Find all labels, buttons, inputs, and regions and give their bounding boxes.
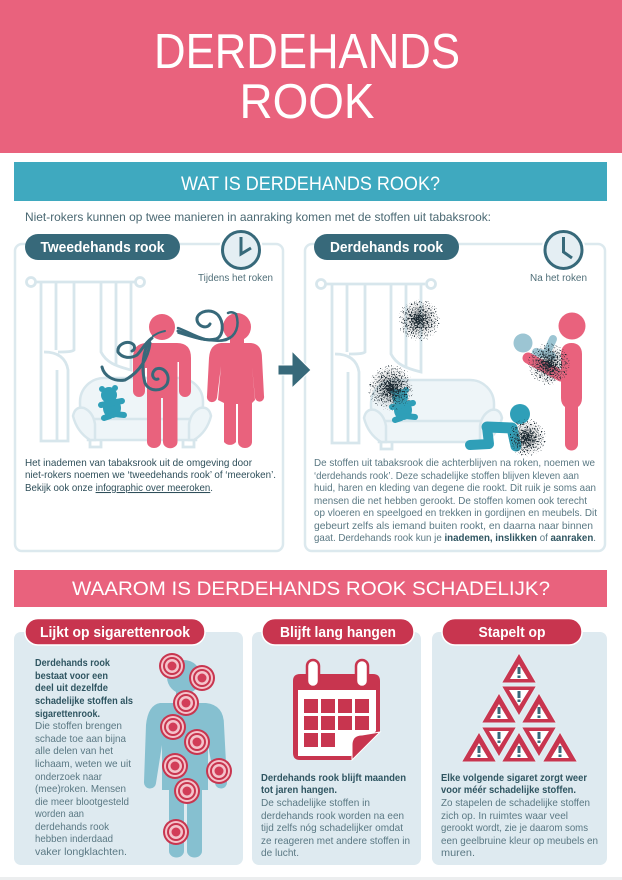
body targets (159, 653, 232, 845)
paragraph: tweedehands rook: Bekijk ook onze infographic over meeroken. (25, 482, 213, 494)
panel: blijft lang hangen (252, 618, 421, 865)
paragraph: De schadelijke stoffen in (261, 797, 370, 809)
paragraph: tot jaren hangen. (261, 784, 337, 796)
pill heading: tweedehands rook (25, 234, 180, 260)
section heading: waarom schadelijk: WAAROM IS DERDEHANDS ROOK SCHADELIJK? (72, 579, 550, 600)
paragraph: muren. (441, 847, 475, 859)
clock label: Na het roken (530, 273, 587, 284)
paragraph: derdehands rook: mensen die net hebben gerookt. De stoffen komen ook terecht (314, 495, 587, 507)
panel: stapelt op (432, 618, 607, 865)
target 9 (163, 819, 189, 845)
target 3 (173, 690, 199, 716)
arrow between panels (278, 351, 311, 388)
paragraph: derdehands rook worden na een (261, 810, 404, 822)
paragraph: Zo stapelen de schadelijke stoffen (441, 797, 590, 809)
paragraph: deel uit dezelfde (35, 682, 108, 694)
baby in arms (514, 334, 553, 356)
target 6 (162, 753, 188, 779)
paragraph: derdehands rook: op vloeren en speelgoed en trekken in gordijnen en meubels. Dit (314, 507, 597, 519)
icon: teddy bear (390, 387, 415, 420)
target 1 (159, 653, 185, 679)
paragraph: tweedehands rook: niet-rokers noemen we ‘tweedehands rook’ of ‘meeroken’. (25, 469, 276, 481)
target 2 (189, 665, 215, 691)
pill heading (262, 618, 414, 645)
target 7 (206, 758, 232, 784)
paragraph: schadelijke stoffen als (35, 695, 133, 707)
paragraph: die meer blootgesteld (35, 796, 129, 808)
pill heading: Stapelt op (478, 624, 546, 641)
paragraph: Derdehands rook blijft maanden (261, 772, 406, 784)
section heading: wat is derdehands rook (14, 162, 607, 201)
icon: teddy bear (99, 385, 124, 418)
pill heading: derdehands rook (314, 234, 459, 260)
intro text: Niet-rokers kunnen op twee manieren in aanraking komen met de stoffen uit tabaksrook: (25, 210, 491, 224)
illustration: curtains (26, 278, 144, 441)
illustration: sofa (73, 378, 211, 447)
paragraph: hebben inderdaad (35, 833, 113, 845)
figure: crawling baby (470, 404, 530, 446)
paragraph (34, 657, 133, 858)
section heading: wat is derdehands rook: WAT IS DERDEHANDS ROOK? (181, 174, 440, 195)
figure: adult holding baby (514, 312, 586, 450)
icon: stacked warning triangles (462, 653, 578, 762)
paragraph: derdehands rook: ‘derdehands rook’. Deze schadelijke stoffen blijven kleven aan (314, 470, 579, 482)
paragraph (441, 772, 598, 859)
pill heading (442, 618, 582, 645)
paragraph: de lucht. (261, 847, 299, 859)
panel: derdehands rook (305, 228, 605, 551)
paragraph: onderzoek naar (35, 771, 102, 783)
panel: lijkt op sigarettenrook (14, 618, 243, 865)
illustration: curtains (316, 280, 436, 443)
figure: blue body (144, 660, 227, 858)
figure: non-smoker (207, 313, 264, 448)
paragraph: Derdehands rook (35, 657, 110, 669)
paragraph: derdehands rook (35, 821, 110, 833)
paragraph: derdehands rook (314, 457, 597, 544)
paragraph: derdehands rook: gebeurt zelfs als iemand buiten rookt, en daarna naar binnen (314, 520, 593, 532)
icon: clock after smoking (542, 228, 586, 272)
smoke swirls (102, 311, 238, 390)
paragraph: sigarettenrook. (35, 708, 100, 720)
paragraph: zich op. In ruimtes waar veel (441, 810, 568, 822)
clock label: Tijdens het roken (198, 273, 273, 284)
pill heading: derdehands rook: Derdehands rook (330, 239, 444, 256)
smoke residue particles (367, 298, 571, 458)
paragraph: tweedehands rook (25, 457, 276, 494)
figure: smoker (133, 314, 191, 448)
target 4 (160, 714, 186, 740)
paragraph: tijd zelfs nóg schadelijker omdat (261, 822, 403, 834)
paragraph: Elke volgende sigaret zorgt weer (441, 772, 587, 784)
target 8 (174, 778, 200, 804)
icon: clock during smoking (219, 228, 263, 272)
pill heading: Lijkt op sigarettenrook (40, 624, 191, 641)
paragraph: Die stoffen brengen (35, 720, 122, 732)
paragraph: lichaam, weten we uit (35, 758, 131, 770)
pill heading: Blijft lang hangen (280, 624, 396, 641)
illustration: sofa (364, 380, 502, 449)
pill heading (25, 618, 205, 645)
paragraph: (mee)roken. Mensen (35, 783, 126, 795)
target 5 (184, 729, 210, 755)
paragraph: bestaat voor een (35, 670, 108, 682)
paragraph: derdehands rook: huid, haren en kleding van degene die rookt. Dit ruik je soms aan (314, 482, 596, 494)
paragraph: voor méér schadelijke stoffen. (441, 784, 576, 796)
panel: tweedehands rook (15, 228, 283, 551)
paragraph: gerookt wordt, zie je daarom soms (441, 822, 588, 834)
paragraph (261, 772, 410, 859)
paragraph: derdehands rook: gaat. Derdehands rook kun je inademen, inslikken of aanraken. (314, 532, 596, 544)
header banner: ROOK (240, 75, 375, 129)
paragraph: vaker longklachten. (35, 846, 127, 858)
icon: calendar (293, 660, 380, 760)
header banner (0, 0, 622, 153)
paragraph: derdehands rook: De stoffen uit tabaksrook die achterblijven na roken, noemen we (314, 457, 595, 469)
adult arm (528, 358, 561, 376)
paragraph: alle delen van het (35, 745, 113, 757)
paragraph: een geelbruine kleur op meubels en (441, 835, 598, 847)
paragraph: ze reageren met andere stoffen in (261, 835, 410, 847)
section heading: waarom schadelijk (14, 570, 607, 607)
pill heading: tweedehands rook: Tweedehands rook (40, 239, 165, 256)
title: DERDEHANDS (154, 25, 460, 79)
paragraph: tweedehands rook: Het inademen van tabaksrook uit de omgeving door (25, 457, 252, 469)
paragraph: schade toe aan bijna (35, 733, 126, 745)
paragraph: worden aan (34, 808, 84, 820)
